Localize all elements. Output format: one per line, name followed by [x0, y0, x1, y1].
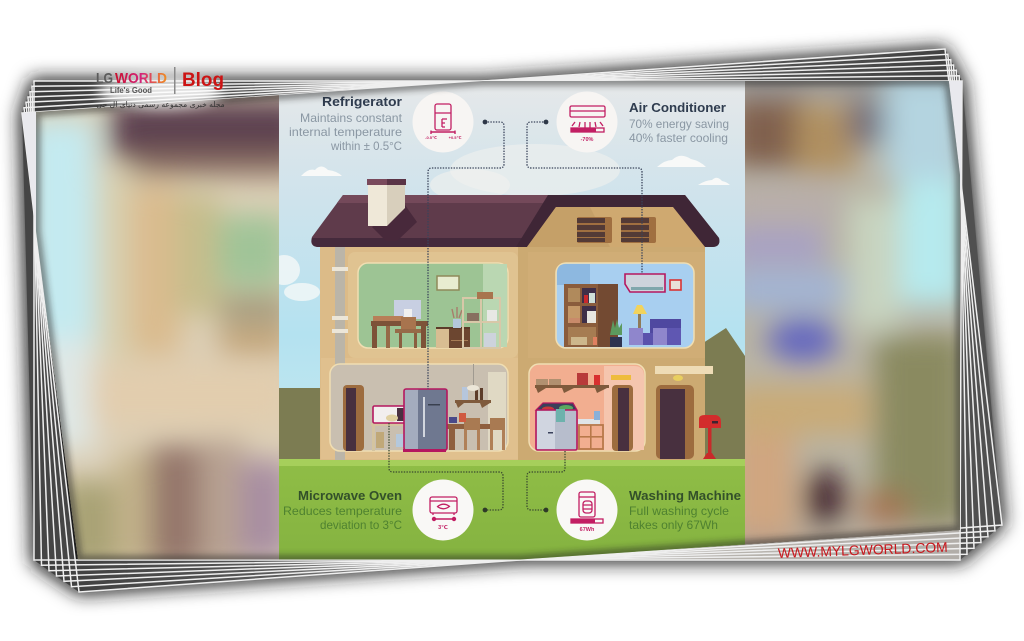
logo: LG World: LG [96, 70, 113, 87]
blurred background left [36, 95, 279, 560]
text: microwave oven [283, 488, 402, 532]
edge shading [36, 81, 960, 560]
watermark url: WWW.MYLGWORLD.COM [778, 539, 948, 561]
room: upper right living [556, 263, 694, 348]
logo: LG World: Life's Good [110, 85, 152, 95]
nightstand [436, 307, 470, 348]
icon: microwave [412, 480, 474, 540]
laundry door [612, 385, 633, 451]
text: refrigerator: within ± 0.5°C [330, 139, 402, 153]
bookcase [564, 284, 618, 347]
refrigerator [403, 389, 447, 452]
logo: LG World: Blog [182, 70, 224, 91]
clouds [268, 144, 730, 301]
icon: refrigerator: +0.5℃ [449, 135, 462, 140]
text: washing machine: Washing Machine [629, 488, 741, 503]
picture [437, 276, 459, 290]
text: air conditioner: 70% energy saving [629, 117, 729, 131]
sky [279, 82, 745, 388]
ground [279, 459, 745, 565]
sofa [629, 319, 681, 345]
walls [320, 245, 705, 460]
text: refrigerator: Refrigerator [322, 94, 402, 109]
text: washing machine: takes only 67Wh [629, 518, 718, 532]
text: washing machine: Full washing cycle [629, 504, 729, 518]
icon: washing machine: 67Wh [580, 527, 595, 533]
logo subtitle: مجله خبری مجموعه رسمی دنیای ال جی [96, 100, 225, 109]
sink table [578, 411, 603, 449]
plant [610, 319, 622, 347]
text: microwave oven: deviation to 3°C [320, 518, 402, 532]
shelving unit [463, 292, 500, 348]
lamp [633, 305, 647, 330]
icon: refrigerator [412, 92, 474, 152]
wall shelf and lamp [455, 364, 491, 408]
chimney [367, 179, 417, 241]
logo backdrop glow [98, 76, 222, 108]
text: refrigerator: Maintains constant [300, 111, 403, 125]
dotted connector: refrigerator [428, 120, 504, 389]
photo image area [20, 65, 970, 575]
microwave table [371, 423, 404, 451]
room: upper left study [358, 263, 508, 348]
icon: refrigerator: -0.5℃ [425, 135, 437, 140]
house [311, 179, 721, 460]
logo: LG World: WORLD [115, 70, 167, 87]
hills [279, 328, 745, 463]
dotted connector: microwave [389, 423, 503, 512]
icon: air conditioner: -70% [581, 137, 594, 143]
dotted connector: air conditioner [527, 120, 642, 274]
text: refrigerator: internal temperature [289, 125, 402, 139]
porch lintel and lamp [655, 366, 713, 381]
text: microwave oven: Reduces temperature [283, 504, 402, 518]
roof [311, 195, 719, 247]
logo: LG World [96, 67, 224, 95]
icon: air conditioner [556, 92, 618, 152]
text: air conditioner: 40% faster cooling [629, 131, 728, 145]
drainpipe [332, 246, 348, 460]
dining table [447, 413, 505, 450]
icon: microwave: 3℃ [438, 524, 448, 531]
dotted connector: washing machine [527, 451, 565, 512]
icon: washing machine [556, 480, 618, 540]
kitchen door [343, 385, 364, 451]
text: air conditioner [629, 100, 729, 145]
clock [670, 280, 681, 290]
room: lower right laundry [529, 364, 645, 451]
text: air conditioner: Air Conditioner [629, 100, 726, 115]
room: lower left kitchen [330, 364, 508, 452]
vents [577, 217, 656, 243]
microwave [373, 406, 407, 423]
washing machine [536, 403, 577, 450]
desk and monitor [371, 300, 428, 348]
laundry shelves [535, 373, 631, 393]
text: microwave oven: Microwave Oven [298, 488, 402, 503]
text: washing machine [629, 488, 741, 532]
front door [656, 385, 694, 459]
mailbox [699, 415, 721, 459]
blurred background right [745, 81, 960, 544]
text: refrigerator [289, 94, 403, 153]
AC unit [625, 274, 665, 292]
central infographic panel [268, 81, 745, 565]
